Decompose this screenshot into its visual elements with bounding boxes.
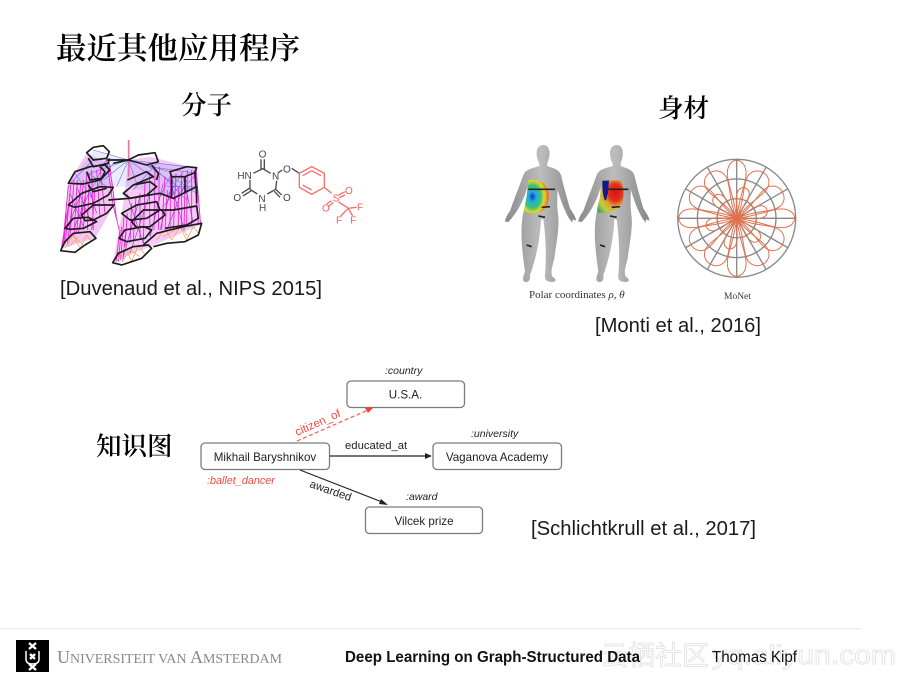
node type: country: :country	[385, 365, 423, 377]
figure: molecule structure	[233, 150, 363, 227]
edge: awarded: awarded	[308, 478, 353, 504]
node: Mikhail Baryshnikov: Mikhail Baryshnikov	[214, 451, 316, 464]
logo: university crest	[16, 640, 49, 672]
node type: university: :university	[471, 428, 519, 440]
node type: ballet dancer: :ballet_dancer	[207, 475, 275, 487]
node: Vilcek prize: Vilcek prize	[394, 515, 454, 528]
figure: molecule structure: O	[345, 186, 353, 197]
figure: molecule structure: N	[272, 172, 279, 183]
caption: polar coordinates: Polar coordinates ρ, θ	[529, 289, 625, 301]
figure: molecular graph stack	[61, 140, 202, 265]
title: 最近其他应用程序	[56, 24, 300, 68]
footer: author: Thomas Kipf	[712, 649, 798, 666]
figure: MoNet polar plot	[678, 159, 796, 277]
heading: molecules: 分子	[181, 86, 232, 122]
footer: university name: UNIVERSITEIT VAN AMSTERDAM	[57, 647, 282, 667]
figure: molecule structure: O	[322, 203, 330, 214]
figure: molecule structure: O	[283, 193, 291, 204]
watermark: 云栖社区	[601, 634, 709, 673]
citation: Duvenaud: [Duvenaud et al., NIPS 2015]	[60, 278, 322, 300]
node type: award: :award	[406, 491, 439, 503]
edge: awarded	[300, 470, 388, 505]
figure: molecule structure: F	[350, 216, 356, 227]
figure: molecule structure: O	[283, 164, 291, 175]
edge: citizen_of	[293, 407, 374, 441]
edge: educated_at	[330, 440, 432, 459]
figure: molecule structure: N	[258, 194, 266, 205]
footer rule	[0, 628, 862, 630]
watermark	[601, 634, 896, 673]
edge: educated_at: educated_at	[345, 440, 408, 452]
node: Vilcek prize	[366, 507, 482, 534]
heading: knowledge graphs: 知识图	[96, 427, 173, 463]
node: Mikhail Baryshnikov	[201, 443, 330, 470]
figure: knowledge graph	[201, 365, 562, 534]
caption: MoNet: MoNet	[724, 292, 751, 302]
figure: molecule structure: HN	[237, 171, 252, 182]
figure: molecule structure: S	[333, 193, 340, 204]
footer: talk title: Deep Learning on Graph-Structured Data	[345, 649, 640, 666]
node: U.S.A.	[347, 381, 464, 408]
heading: shapes: 身材	[658, 89, 709, 125]
node: Vaganova Academy	[433, 443, 562, 470]
figure: molecule structure: F	[336, 216, 342, 227]
figure: molecule structure: O	[233, 193, 241, 204]
figure: body shape 1	[505, 145, 576, 282]
watermark: yq.aliyun.com	[712, 640, 896, 670]
node: Vaganova Academy: Vaganova Academy	[446, 451, 548, 464]
citation: Monti: [Monti et al., 2016]	[595, 315, 761, 337]
figure: molecule structure: F	[357, 203, 363, 214]
figure: molecule structure: H	[259, 203, 266, 214]
figure: body shape 2	[578, 145, 649, 282]
citation: Schlichtkrull: [Schlichtkrull et al., 2017]	[531, 518, 756, 540]
figure: molecule structure: O	[259, 150, 267, 161]
edge: citizen_of: citizen_of	[293, 408, 343, 439]
node: U.S.A.: U.S.A.	[389, 388, 422, 402]
